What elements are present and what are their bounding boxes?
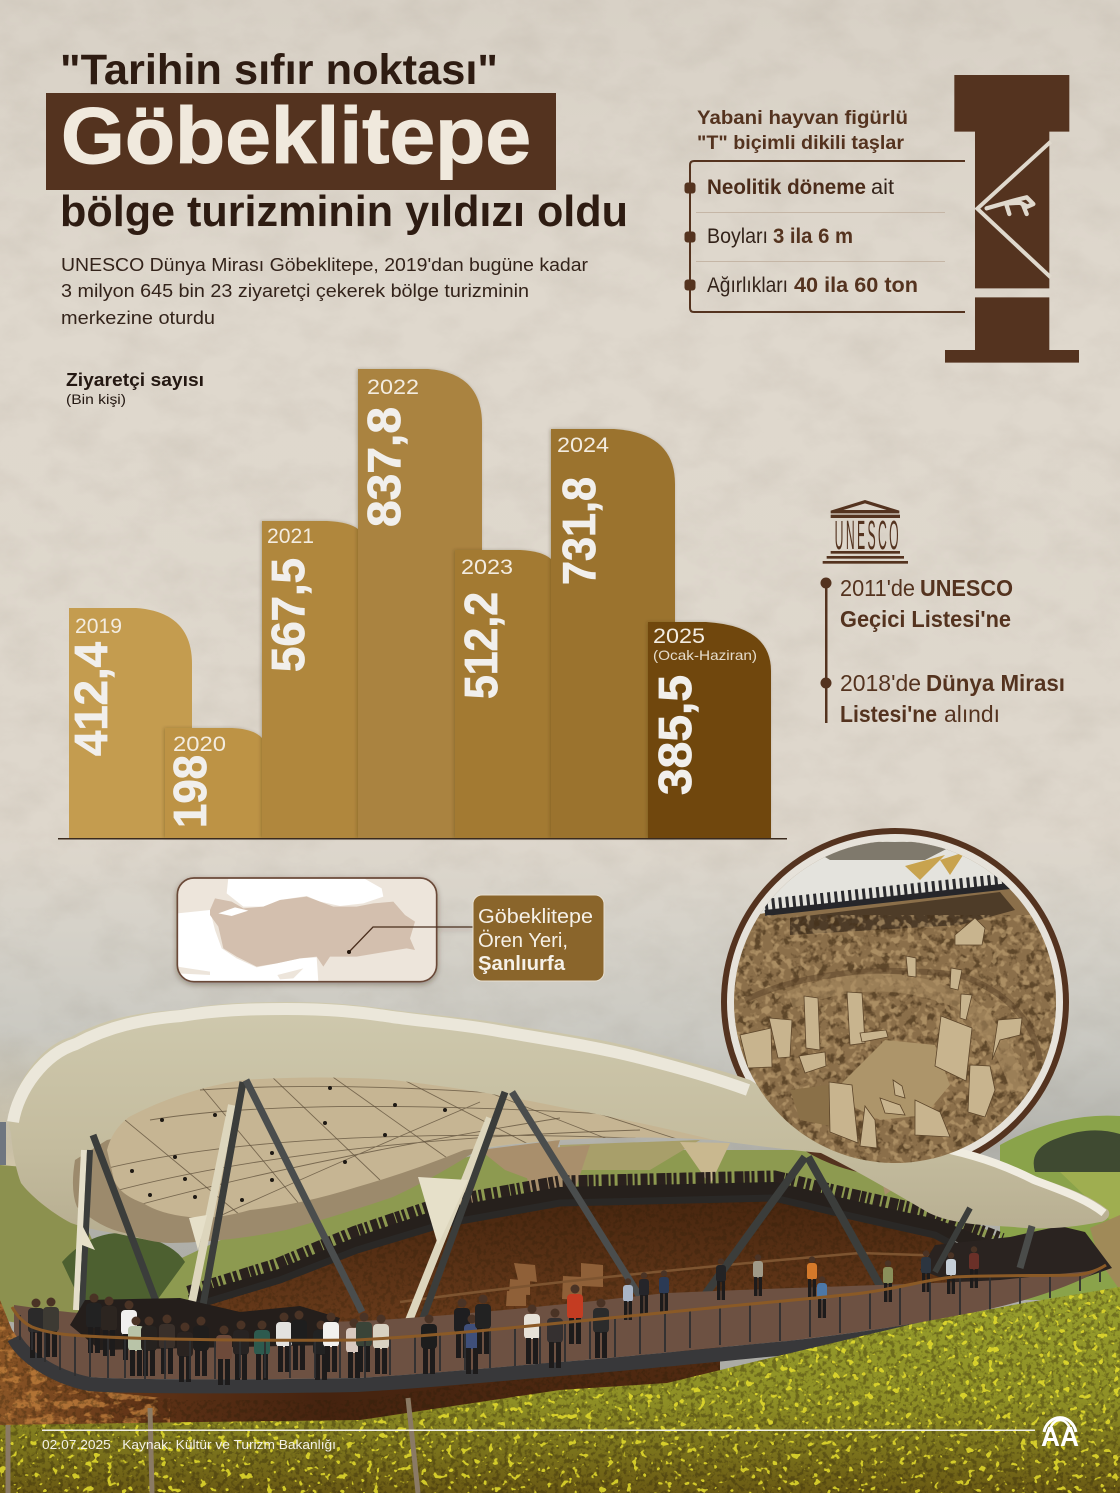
- fact: height: 3 ila 6 m: [773, 225, 853, 248]
- intro text: [61, 255, 588, 328]
- timeline entry 2011: UNESCO: [920, 575, 1013, 601]
- bar 2025: 385,5: [649, 675, 701, 795]
- excavation wall: [210, 1202, 969, 1322]
- title line: Tarihin sıfır noktası: "Tarihin sıfır noktası": [60, 46, 498, 94]
- timeline entry 2018: 2018'de: [840, 670, 921, 696]
- icon: AA logo: AA: [1041, 1421, 1079, 1452]
- intro text: merkezine oturdu: [61, 308, 215, 328]
- canopy fabric with cable grid: [100, 1075, 720, 1225]
- far shelter tents: [360, 1140, 905, 1250]
- steel A-frame supports: [76, 1080, 1032, 1340]
- title highlight: Göbeklitepe: Göbeklitepe: [61, 91, 531, 180]
- fact: Neolitik: ait: [871, 176, 894, 199]
- medallion photo: [730, 838, 1060, 1170]
- bar 2022: 837,8: [358, 407, 410, 527]
- bar 2019: 412,4: [65, 642, 117, 756]
- location callout: Göbeklitepe: [478, 906, 593, 928]
- location leader line: [347, 927, 473, 954]
- bar 2023: 2023: [461, 556, 513, 579]
- subtitle: bölge turizminin yıldızı oldu: [60, 187, 628, 236]
- photo: Göbeklitepe shelter and site: [0, 831, 1120, 1493]
- title block: [46, 46, 628, 236]
- location callout: [473, 895, 604, 981]
- icon: T pillar with animal: [945, 75, 1079, 363]
- bar 2021: [262, 521, 358, 838]
- bar 2025: [648, 622, 771, 838]
- far fields: [0, 1116, 1120, 1330]
- fact: height: Boyları: [707, 225, 768, 248]
- timeline entry 2018: Dünya Mirası: [926, 670, 1065, 696]
- bar 2025: (Ocak-Haziran): [653, 647, 757, 663]
- Turkey land: [210, 897, 415, 967]
- earth slope and under-deck: [0, 1300, 720, 1425]
- walkway railing: [12, 1265, 1106, 1379]
- panel heading: [697, 108, 908, 154]
- bar 2024: 2024: [557, 434, 609, 457]
- fact: weight: [707, 274, 918, 297]
- bar 2023: 512,2: [455, 592, 507, 699]
- intro text: 3 milyon 645 bin 23 ziyaretçi çekerek bölge turizminin: [61, 281, 529, 301]
- Aegean and Mediterranean seas: [177, 910, 318, 982]
- upper walkway with crowd: [180, 1183, 1000, 1310]
- bar 2020: [164, 728, 262, 838]
- right side crowd: [920, 1226, 1112, 1282]
- timeline entry 2011: 2011'de: [840, 575, 915, 601]
- panel heading: Yabani hayvan figürlü: [697, 108, 908, 129]
- timeline entry 2018: alındı: [944, 701, 1000, 727]
- bar 2021: 2021: [267, 525, 314, 548]
- bar 2025: 2025: [653, 625, 705, 648]
- shelter canopy: [9, 1002, 1109, 1243]
- bar 2024: 731,8: [553, 477, 605, 585]
- location callout: Ören Yeri,: [478, 930, 568, 952]
- chart heading: (Bin kişi): [66, 391, 126, 407]
- bar 2019: [65, 608, 192, 838]
- timeline entry 2018: Listesi'ne: [840, 701, 937, 727]
- UNESCO panel: [820, 500, 1065, 727]
- bar 2020: 198: [164, 755, 216, 828]
- chart baseline: [58, 838, 787, 840]
- foreground grass with yellow flowers: [0, 1285, 1120, 1493]
- icon: UNESCO temple logo: [823, 500, 908, 564]
- timeline entry 2011: [840, 575, 1013, 632]
- timeline line: [820, 578, 832, 723]
- bar 2024: [551, 429, 675, 838]
- medallion ring: [724, 831, 1066, 1173]
- timeline entry 2011: Geçici Listesi'ne: [840, 606, 1011, 632]
- bar 2019: 2019: [75, 615, 122, 638]
- chart heading: [66, 370, 204, 407]
- panel heading: "T" biçimli dikili taşlar: [697, 133, 905, 154]
- chart heading: Ziyaretçi sayısı: [66, 370, 204, 390]
- bar 2021: 567,5: [262, 558, 314, 672]
- fact: weight: 40 ila 60 ton: [794, 274, 918, 297]
- fact: Neolitik: Neolitik döneme: [707, 176, 866, 199]
- map inset: [177, 878, 473, 982]
- footer: [42, 1418, 1079, 1452]
- visitors on deck: [28, 1246, 979, 1385]
- site photo medallion: [730, 838, 1060, 1170]
- source line: 02.07.2025 Kaynak: Kültür ve Turizm Bakanlığı: [42, 1437, 336, 1452]
- bar 2023: [455, 550, 551, 838]
- fact: height: [707, 225, 853, 248]
- bar 2022: [358, 369, 482, 838]
- bar 2020: 2020: [173, 733, 226, 756]
- walkway deck: [14, 1270, 1100, 1386]
- Black Sea: [227, 878, 383, 907]
- icon: UNESCO temple logo: UNESCO: [835, 514, 899, 558]
- intro text: UNESCO Dünya Mirası Göbeklitepe, 2019'dan bugüne kadar: [61, 255, 588, 275]
- T-shaped pillar panel: [684, 75, 1079, 363]
- location callout: Şanlıurfa: [478, 953, 566, 975]
- bar 2022: 2022: [367, 376, 419, 399]
- chart: visitors by year: [58, 369, 787, 840]
- bracket with bullets: [684, 161, 965, 312]
- crowd mass behind visitors: [70, 1298, 340, 1350]
- timeline entry 2018: [840, 670, 1065, 727]
- fact: weight: Ağırlıkları: [707, 274, 788, 297]
